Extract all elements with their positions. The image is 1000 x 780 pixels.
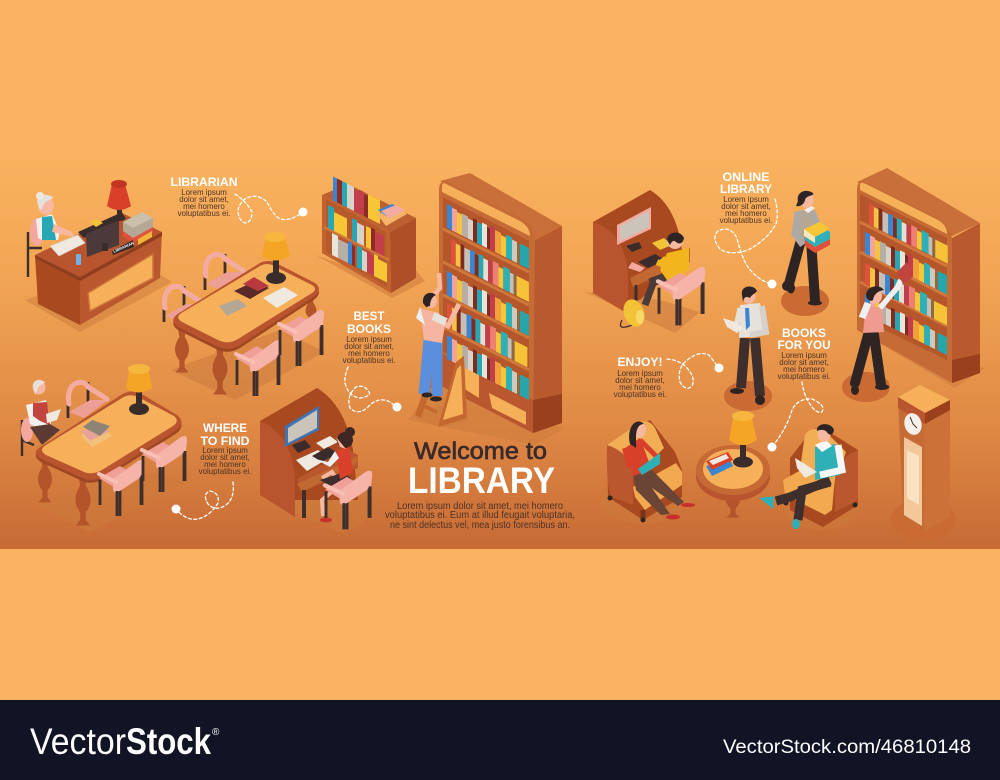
woman at bookcase bbox=[842, 262, 912, 402]
callout: online library bbox=[715, 170, 777, 288]
callout: books for you: mei homero bbox=[783, 365, 825, 374]
armchair with reading man bbox=[763, 424, 860, 530]
callout: where to find: mei homero bbox=[204, 460, 246, 469]
callout: librarian: LIBRARIAN bbox=[170, 175, 238, 189]
callout: best books: BOOKS bbox=[347, 322, 391, 336]
yellow backpack bbox=[620, 296, 648, 330]
carried books bbox=[804, 222, 830, 253]
footer logo bbox=[30, 721, 220, 762]
near chair 3 bbox=[99, 460, 144, 516]
callout: enjoy: Lorem ipsum bbox=[617, 369, 663, 378]
round side table bbox=[696, 411, 770, 518]
side table books bbox=[706, 452, 733, 476]
reading table 1 bbox=[173, 261, 319, 394]
page background top band bbox=[0, 0, 1000, 165]
far chair 2 bbox=[205, 254, 245, 290]
callout: best books bbox=[343, 309, 402, 412]
right bookcase books bbox=[865, 203, 948, 355]
dashed path bbox=[176, 482, 233, 519]
near chair 1 bbox=[236, 340, 281, 396]
pulled book bbox=[897, 262, 912, 284]
footer logo: ® bbox=[212, 727, 220, 738]
callout: online library: mei homero bbox=[725, 209, 767, 218]
books on small shelf bbox=[328, 174, 387, 283]
callout: librarian: dolor sit amet, bbox=[179, 195, 229, 204]
table 2 lamp bbox=[126, 364, 152, 415]
dashed path bbox=[235, 194, 303, 223]
dashed path bbox=[715, 199, 777, 284]
clock glass bbox=[904, 437, 922, 526]
seated man bbox=[763, 424, 842, 529]
title: LIBRARY bbox=[408, 460, 555, 501]
callout: where to find: voluptatibus ei. bbox=[199, 467, 251, 476]
footer bar bbox=[0, 700, 1000, 780]
book stack bbox=[123, 212, 153, 245]
callout: where to find: Lorem ipsum bbox=[202, 446, 248, 455]
page background lower band bbox=[0, 549, 1000, 700]
mouse pad bbox=[90, 219, 103, 227]
seated woman bbox=[625, 421, 695, 520]
end dot bbox=[298, 208, 308, 216]
end dot bbox=[392, 402, 402, 412]
librarian desk bbox=[25, 180, 172, 332]
callout: books for you bbox=[768, 326, 830, 452]
callout: enjoy: dolor sit amet, bbox=[615, 376, 665, 385]
title description: Lorem ipsum dolor sit amet, mei homero bbox=[397, 501, 563, 512]
end dot bbox=[768, 442, 776, 452]
callout: where to find bbox=[172, 421, 251, 519]
title description bbox=[385, 501, 575, 531]
callout: books for you: FOR YOU bbox=[778, 338, 830, 352]
callout: where to find: dolor sit amet, bbox=[200, 453, 250, 462]
carrel keyboard bbox=[312, 447, 338, 462]
panel: isometric library floor bbox=[0, 160, 1000, 549]
callout: online library: LIBRARY bbox=[720, 182, 772, 196]
book on desk bbox=[50, 235, 85, 256]
callout: enjoy: ENJOY! bbox=[618, 355, 662, 369]
ladder bbox=[413, 356, 470, 427]
table 2 books bbox=[81, 420, 112, 447]
callout: online library: ONLINE bbox=[722, 170, 770, 184]
title description: ne sint delectus vel, mea justo forensibus an. bbox=[390, 520, 570, 531]
small stack on shelf top bbox=[377, 204, 407, 226]
large bookcase right bbox=[857, 168, 985, 388]
side table lamp bbox=[729, 411, 757, 468]
callout: books for you: BOOKS bbox=[782, 326, 826, 340]
title description: voluptatibus ei. Eum at illud feugait voluptaria, bbox=[385, 510, 575, 521]
callout: books for you: dolor sit amet, bbox=[779, 358, 829, 367]
callout: librarian: voluptatibus ei. bbox=[178, 209, 230, 218]
callout: best books: mei homero bbox=[348, 349, 390, 358]
man on ladder bbox=[416, 273, 459, 402]
man standing reading bbox=[723, 286, 772, 411]
desk lamp red bbox=[107, 180, 131, 221]
callout: online library: voluptatibus ei. bbox=[720, 216, 772, 225]
monitor bbox=[78, 214, 122, 257]
callout: books for you: voluptatibus ei. bbox=[778, 372, 830, 381]
nameplate: LIBRARIAN bbox=[112, 240, 135, 254]
bookshelf small bbox=[316, 174, 425, 298]
water glass bbox=[76, 254, 81, 265]
callout: enjoy: mei homero bbox=[619, 383, 661, 392]
footer logo: Vector bbox=[30, 721, 126, 762]
table 1 shadow bbox=[170, 330, 325, 400]
dashed path bbox=[772, 382, 823, 447]
carrel open book bbox=[296, 450, 329, 471]
callout: where to find: TO FIND bbox=[200, 434, 250, 448]
armchair with reading woman bbox=[600, 420, 695, 524]
callout: librarian: mei homero bbox=[183, 202, 225, 211]
callout: online library: dolor sit amet, bbox=[721, 202, 771, 211]
dashed path bbox=[345, 367, 397, 412]
man with yellow sweater bbox=[645, 232, 689, 305]
table 2 shadow bbox=[35, 470, 190, 532]
study carrel with girl bbox=[258, 388, 375, 534]
far chair 1 bbox=[164, 286, 204, 322]
callout: best books: BEST bbox=[354, 309, 385, 323]
center bookcase books bbox=[447, 204, 529, 400]
callout: best books: Lorem ipsum bbox=[346, 335, 392, 344]
man reading at table 2 bbox=[21, 380, 61, 456]
reading table 2 bbox=[36, 391, 181, 526]
callout: best books: dolor sit amet, bbox=[344, 342, 394, 351]
table 1 books bbox=[219, 277, 298, 316]
keyboard and pad bbox=[638, 254, 665, 268]
callout: librarian: Lorem ipsum bbox=[181, 188, 227, 197]
footer stock id: VectorStock.com/46810148 bbox=[723, 737, 971, 758]
end dot bbox=[768, 280, 776, 288]
near chair 2 bbox=[279, 310, 324, 366]
title: Welcome to bbox=[414, 438, 547, 465]
girl figure bbox=[315, 427, 355, 522]
near chair 4 bbox=[142, 436, 187, 492]
callout: where to find: WHERE bbox=[203, 421, 247, 435]
librarian figure bbox=[28, 192, 75, 277]
online monitor bbox=[617, 207, 651, 252]
table 1 lamp bbox=[262, 232, 290, 284]
far chair 3 bbox=[68, 382, 108, 418]
footer logo: Stock bbox=[126, 721, 211, 762]
large bookcase center bbox=[408, 173, 565, 445]
woman carrying books bbox=[781, 191, 830, 316]
study carrel with man bbox=[585, 190, 705, 333]
callout: librarian bbox=[170, 175, 308, 223]
callout: enjoy bbox=[614, 354, 724, 399]
dashed path bbox=[667, 354, 719, 388]
end dot bbox=[714, 364, 724, 372]
end dot bbox=[172, 504, 180, 514]
clock face bbox=[902, 411, 924, 437]
title bbox=[408, 438, 555, 501]
callout: online library: Lorem ipsum bbox=[723, 195, 769, 204]
callout: best books: voluptatibus ei. bbox=[343, 356, 395, 365]
grandfather clock bbox=[890, 385, 956, 540]
carrel monitor bbox=[285, 406, 319, 453]
callout: books for you: Lorem ipsum bbox=[781, 351, 827, 360]
callout: enjoy: voluptatibus ei. bbox=[614, 390, 666, 399]
